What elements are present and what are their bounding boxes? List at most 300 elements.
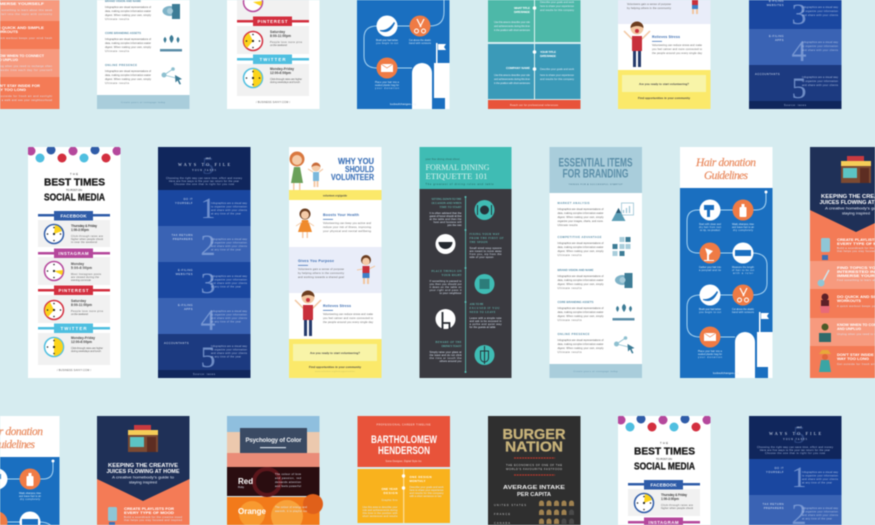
- card: keeping creative juices, top row: [0, 0, 60, 109]
- icon: storefront: [841, 156, 871, 183]
- section: online presence: ONLINE PRESENCE: [558, 332, 590, 336]
- section: boosts your health: your physical and mental wellbeing: [323, 229, 372, 233]
- section: gives you purpose: by helping others in the community: [298, 271, 345, 275]
- card: why you should volunteer, top row: Are you ready to start volunteering?: [639, 82, 689, 86]
- section: competitive advantage: [558, 235, 630, 257]
- section 3: WEBSITES: [176, 272, 193, 276]
- step 4: [436, 303, 502, 329]
- step captions: Place your hair into a: [698, 350, 723, 353]
- step 5: the toast and do not clink: [430, 353, 462, 357]
- section: market analysis: data, making complex information easier: [558, 211, 604, 215]
- panel: orange: Orange: [238, 507, 267, 516]
- tip rows: INTERESTED IN AND: [837, 270, 875, 274]
- step 3: [430, 270, 494, 295]
- panel: twitter: Click-through rates are higher: [71, 346, 103, 350]
- card: ways to file taxes, top row: and share with your clients: [802, 48, 839, 52]
- step 5: the rims or touch the: [430, 356, 462, 360]
- card: keeping creative juices, bottom row: JUICES FLOWING AT HOME: [106, 469, 180, 475]
- card: best times social media, bottom row: SOCIAL MEDIA: [634, 461, 695, 473]
- card: teal and blue timeline, top row: DATE RANGE: [514, 10, 530, 14]
- section: market analysis: Ultimate results: [558, 223, 578, 227]
- title: HENDERSON: [378, 445, 430, 457]
- card: ways to file taxes, bottom row: [749, 416, 842, 525]
- panel: pinterest: Saturday: [71, 299, 86, 303]
- section: boosts your health: Volunteering can keep you active and: [323, 221, 372, 225]
- timeline: Graphic firm: [382, 498, 398, 502]
- card: best times social media, bottom row: 1:00-3:00pm: [661, 497, 679, 501]
- section: market analysis: Infographics are visual representations of: [558, 207, 604, 211]
- section 4: at any time of the year: [211, 320, 241, 324]
- card: ways to file taxes, bottom row: DO IT: [775, 466, 784, 470]
- card: hair donation guidelines, top row: locksofchanges.org: [390, 102, 416, 106]
- card: bartholomew henderson timeline: [358, 416, 450, 523]
- card: essential items for branding, top row: Infographics are visual representations of: [105, 37, 151, 41]
- section 1: at any time of the year: [211, 212, 241, 216]
- title: FORMAL DINING: [426, 162, 490, 172]
- card: ways to file taxes, top row: Infographics are a visual way: [802, 5, 839, 9]
- card: essential items for branding, top row: data, making complex information easier: [105, 73, 151, 77]
- step captions: sealed plastic bag for: [698, 353, 722, 356]
- footer: locksofchanges.org: [713, 371, 739, 375]
- panel: red: The colour of love: [275, 472, 302, 476]
- subtitle: [506, 463, 562, 471]
- subtitle: THE ECONOMICS OF ONE OF THE: [506, 463, 562, 467]
- card: essential items for branding, top row: digest. When making your own, simply: [105, 77, 152, 81]
- card: hair donation, bottom row: dry completely: [20, 498, 41, 501]
- step 4: EXCUSED IF YOU: [470, 307, 500, 310]
- card: hair donation guidelines, top row: Cut above the elastic: [409, 39, 432, 42]
- card: teal and blue timeline, top row: Use this area to describe your role: [494, 73, 531, 77]
- step 1: It is often advised that the: [430, 211, 462, 215]
- card: best times social media, top row: Click-through rates are higher: [270, 77, 302, 81]
- card: hair donation guidelines: [680, 147, 772, 378]
- title: staying inspired: [842, 212, 870, 216]
- panel: twitter: 12:00-6:00pm: [71, 340, 92, 344]
- card: best times social media, top row: PINTEREST: [258, 19, 288, 24]
- section 2: [172, 229, 248, 262]
- section 3: E-FILING: [178, 268, 193, 272]
- section: boosts your health: reduce your risk of illness, improving: [323, 225, 372, 229]
- card: essential items for branding, top row: digest. When making your own, simply: [105, 45, 152, 49]
- timeline: [362, 469, 444, 523]
- title: [44, 172, 105, 204]
- panel: orange: warmth, it is playful too: [275, 509, 308, 513]
- card: ways to file taxes, top row: and share with your clients: [802, 13, 839, 17]
- step 1: host and hostess will: [434, 220, 462, 224]
- timeline: with a short sentence or two: [410, 494, 442, 498]
- section: gives you purpose: and working towards a shared goal: [298, 275, 344, 279]
- section: relieves stress: Volunteering can reduce stress and make: [323, 312, 374, 316]
- section 5: 5: [200, 341, 216, 374]
- pictogram chart: [494, 500, 574, 525]
- section 3: and share with your clients: [211, 281, 248, 285]
- card: teal and blue timeline, top row: [488, 0, 580, 109]
- panel: red: demands attention: [275, 480, 302, 484]
- pictogram chart: FRANCE: [494, 512, 510, 516]
- card: ways to file taxes, top row: 4: [792, 35, 806, 68]
- card: ways to file taxes, top row: ACCOUNTANTS: [755, 72, 780, 76]
- section 2: TAX RETURN: [172, 233, 193, 237]
- title: ESSENTIAL ITEMS: [558, 158, 633, 170]
- step 3: PLACE THINGS ON: [432, 270, 462, 273]
- card: ways to file taxes, top row: 5: [792, 72, 806, 105]
- card: ways to file taxes, top row: [749, 0, 842, 109]
- card: ways to file taxes, bottom row: and share with your clients: [802, 513, 839, 517]
- card: best times social media, top row: Monday-Friday: [270, 67, 294, 71]
- panel: facebook: Thursday & Friday: [71, 224, 97, 228]
- title: WHY YOU: [338, 157, 374, 166]
- title: THE: [70, 172, 78, 176]
- title: NATION: [505, 438, 563, 456]
- step 3: it down on the table on: [430, 285, 462, 289]
- card: essential items for branding: [550, 147, 642, 378]
- section: online presence: data, making complex information easier: [558, 342, 604, 346]
- step 3: If something is passed to: [430, 279, 462, 283]
- card: teal and blue timeline, top row: Reach out for professional references: [510, 104, 559, 107]
- timeline: and results for this company: [410, 491, 444, 495]
- card: teal and blue timeline, top row: COMPANY NAME: [506, 66, 530, 70]
- panel: twitter: Monday-Friday: [71, 336, 95, 340]
- card: ways to file taxes, top row: Source: taxes: [784, 103, 807, 107]
- title: 5: [202, 154, 214, 180]
- title: BEST TIMES: [44, 177, 105, 189]
- card: essential items for branding, top row: Ultimate results: [105, 17, 130, 21]
- card: keeping the creative juices flowing: [810, 147, 875, 378]
- step 5: others around you: [440, 359, 462, 363]
- section: brand vision and name: data, making complex information easier: [558, 278, 604, 282]
- card: essential items for branding, top row: Infographics are visual representations of: [105, 5, 151, 9]
- section: core branding assets: Infographics are visual representations of: [558, 306, 604, 310]
- call to action: Find opportunities in your community: [309, 365, 361, 369]
- timeline: role and achievements during: [362, 508, 398, 512]
- timeline: Describe your goals and work: [410, 485, 444, 489]
- section 3: at any time of the year: [211, 284, 241, 288]
- step captions: [698, 223, 755, 359]
- section 1: Infographics are a visual way: [211, 201, 248, 205]
- title box: Psychology of Color: [246, 438, 302, 444]
- card: ways to file taxes, bottom row: Choose the one that is right for you now: [765, 451, 825, 455]
- panel: instagram: evening commute: [71, 278, 92, 282]
- card: keeping creative juices, bottom row: EVERY TYPE OF MOOD: [124, 511, 174, 515]
- section 1: [175, 192, 248, 225]
- card: teal and blue timeline, top row: Describe your goals and work: [540, 67, 575, 71]
- card: hair donation guidelines, top row: Place your hair into a: [375, 81, 400, 84]
- panel: instagram: 5:00-6:00pm: [71, 266, 92, 270]
- step 4: ASK TO BE: [470, 303, 484, 306]
- title: THINGS FOR A SUCCESSFUL STARTUP: [568, 183, 623, 186]
- card: hair donation, bottom row: and leave hair to air: [19, 495, 41, 498]
- title: [371, 424, 437, 463]
- panel: pinterest: on the weekend: [71, 312, 89, 316]
- step captions: band with scissors: [732, 311, 755, 314]
- card: ways to file taxes, top row: Infographics are a visual way: [802, 75, 839, 79]
- title: [558, 158, 633, 186]
- step 1: guest of honor should sit first: [430, 214, 462, 218]
- card: why you should volunteer, top row: Volunteering can reduce stress and make: [652, 43, 703, 47]
- title: PROFESSIONAL CAREER TIMELINE: [376, 424, 431, 426]
- section 4: to organize your information: [211, 312, 248, 316]
- pictogram chart: CANADA: [494, 521, 510, 525]
- section 1: and share with your clients: [211, 208, 248, 212]
- card: teal and blue timeline, top row: here to share your experience: [540, 73, 575, 77]
- panel: pinterest: 8:00-11:00pm: [71, 303, 92, 307]
- step 3: to your neighbour: [440, 291, 462, 295]
- card: ways to file taxes, top row: APPS: [775, 38, 784, 42]
- icons: social circles: [26, 146, 122, 162]
- card: psychology of color: [227, 416, 323, 525]
- title: [820, 194, 875, 216]
- timeline: this time in the position with: [362, 511, 398, 515]
- step captions: and leave hair to air: [732, 226, 754, 229]
- section 4: E-FILING: [178, 303, 193, 307]
- steps: [700, 190, 768, 348]
- card: ways to file taxes, bottom row: YOURSELF: [766, 470, 784, 474]
- step captions: Gather your hair into: [699, 266, 722, 269]
- card: ways to file taxes, bottom row: TAX RETURN: [763, 502, 784, 506]
- section: competitive advantage: Ultimate results: [558, 253, 582, 257]
- step 4: Leave with a simple note: [470, 316, 502, 320]
- card: ways to file taxes, top row: Infographics are a visual way: [802, 40, 839, 44]
- card: teal and blue timeline, top row: and results for this company: [540, 8, 575, 12]
- step captions: dry hair from root: [699, 226, 721, 229]
- icons: tip rows: [818, 238, 831, 372]
- card: why you should volunteer: [289, 147, 382, 378]
- section: relieves stress: the people around you every single day: [323, 320, 374, 324]
- section: core branding assets: CORE BRANDING ASSETS: [558, 300, 594, 304]
- step captions: dry completely: [733, 229, 754, 232]
- step 2: FIXING YOUR WAY: [470, 233, 500, 236]
- title: Guidelines: [704, 170, 749, 182]
- card: keeping creative juices, bottom row: Build a soundtrack for the creative mood: [124, 515, 183, 519]
- section 5: at any time of the year: [211, 354, 241, 358]
- title: [166, 154, 243, 186]
- section 5: and share with your clients: [211, 351, 248, 355]
- card: essential items for branding, top row: CORE BRANDING ASSETS: [105, 31, 141, 35]
- card: teal and blue timeline, top row: Use this area to describe your role: [494, 20, 531, 24]
- card: why you should volunteer, top row: you feel calmer and more connected to: [652, 47, 703, 51]
- step 4: for the guests at table: [470, 325, 496, 329]
- section: brand vision and name: [558, 268, 632, 290]
- panel: twitter: [38, 324, 110, 365]
- section 2: Infographics are a visual way: [211, 237, 248, 241]
- card: ways to file taxes, top row: E-FILING: [769, 0, 784, 3]
- card: teal and blue timeline, top row: and results for this company: [540, 77, 575, 81]
- card: teal and blue timeline, top row: in the position with short sentences: [494, 81, 531, 85]
- subtitle: WORLD'S FAVOURITE FASTFOOD: [506, 467, 562, 471]
- section: market analysis: organize your images, charts, and more.: [558, 219, 604, 223]
- card: ways to file taxes, top row: to organize your information: [802, 79, 839, 83]
- title: TO POST ON: [66, 188, 82, 192]
- card: ways to file taxes, top row: to organize your information: [802, 9, 839, 13]
- panel: red: Red: [238, 477, 253, 486]
- card: ways to file taxes, bottom row: Here are five ways to file your tax return for the year: [760, 448, 830, 452]
- panel: facebook: 1:00-3:00pm: [71, 228, 89, 232]
- chart heading: PER CAPITA: [517, 492, 551, 498]
- step captions: with a ruler: [733, 272, 753, 275]
- step 1: [430, 198, 494, 227]
- call to action: www.volunteer.org/find-opportunities: [315, 370, 356, 373]
- card: best times social media, bottom row: THE: [660, 441, 668, 445]
- step 5: [430, 341, 494, 365]
- card: teal and blue timeline, top row: Describe your goals and work: [540, 0, 575, 4]
- card: best times social media, bottom row: INSTAGRAM: [648, 520, 679, 525]
- title: Choosing the right way can save time, effort and money: [166, 176, 243, 180]
- step 5: BEWARE OF THE: [436, 341, 462, 344]
- section 1: YOURSELF: [175, 201, 193, 205]
- panel: instagram: [38, 248, 110, 285]
- section: gives you purpose: Gives You Purpose: [298, 259, 334, 263]
- timeline: Use this area to describe your: [362, 505, 398, 509]
- card: essential items for branding, top row: Create yours at venngage today: [121, 101, 166, 104]
- card: best times to post on social media: [26, 146, 122, 378]
- card: keeping creative juices, bottom row: [97, 416, 190, 525]
- card: ways to file taxes, bottom row: PREPARERS: [764, 506, 784, 510]
- card: ways to file taxes, bottom row: WAYS TO FILE: [769, 431, 821, 436]
- card: teal and blue timeline, top row: DATE RANGE: [540, 54, 556, 58]
- card: essential items for branding, top row: Ultimate results: [105, 49, 130, 53]
- section: competitive advantage: COMPETITIVE ADVANTAGE: [558, 235, 602, 239]
- section: online presence: digest. When making your own, simply: [558, 346, 604, 350]
- card: why you should volunteer, top row: Find opportunities in your community: [638, 96, 690, 100]
- section 5: to organize your information: [211, 348, 248, 352]
- section: online presence: Ultimate results: [558, 350, 582, 354]
- card: why you should volunteer, top row: Relieves Stress: [652, 35, 680, 39]
- title: and: [205, 156, 211, 160]
- panel: red: and passion, red: [275, 476, 302, 480]
- card: why you should volunteer, top row: [618, 0, 710, 109]
- card: essential items for branding, top row: ONLINE PRESENCE: [105, 63, 137, 67]
- panel: instagram: Most Instagram posts: [71, 272, 102, 276]
- card: hair donation guidelines, top row: sealed plastic bag for: [375, 84, 399, 87]
- panel: facebook: FACEBOOK: [60, 214, 87, 218]
- section 5: Infographics are a visual way: [211, 344, 248, 348]
- card: ways to file taxes, bottom row: YOUR TAXES: [783, 438, 808, 441]
- panel: red: Ruby: [238, 485, 245, 489]
- card: teal and blue timeline, top row: YOUR TITLE: [540, 50, 556, 54]
- panel: facebook: [38, 211, 110, 247]
- step 4: and ask to be excused in: [470, 319, 502, 323]
- card: essential items for branding, top row: data, making complex information easier: [105, 9, 151, 13]
- mailbox illustration: [735, 312, 772, 378]
- card: best times social media, bottom row: higher when people check: [661, 506, 694, 510]
- step captions: Brush your hair before: [699, 308, 722, 311]
- card: keeping creative juices, bottom row: KEEPING THE CREATIVE: [108, 463, 179, 469]
- title: YOUR TAXES: [192, 169, 217, 172]
- card: best times social media, top row: 8:00-11:00pm: [270, 34, 291, 38]
- step 2: THE SPOON: [470, 241, 488, 244]
- section: relieves stress: [295, 290, 374, 336]
- path: [687, 192, 767, 337]
- step captions: you begin to cut: [699, 311, 721, 314]
- card: why you should volunteer, top row: the people around you every single day: [652, 51, 703, 55]
- title: Some Designer, Digital Style Inc: [386, 460, 422, 463]
- section 1: to organize your information: [211, 204, 248, 208]
- section 2: PREPARERS: [173, 237, 193, 241]
- section: online presence: [558, 332, 634, 354]
- section: online presence: Infographics are visual representations of: [558, 338, 604, 342]
- step 2: [436, 233, 504, 259]
- section 3: [176, 267, 248, 300]
- card: hair donation, bottom row: [0, 416, 60, 525]
- illustration: girl and boy: [290, 152, 323, 190]
- timeline: short sentences and results: [362, 514, 398, 518]
- section: boosts your health: Boosts Your Health: [323, 213, 359, 217]
- card: ways to file taxes, bottom row: 5: [793, 423, 805, 449]
- panel: pinterest: PINTEREST: [58, 288, 89, 293]
- card: burger nation: [488, 416, 580, 525]
- call to action: [309, 351, 361, 373]
- call to action: Are you ready to start volunteering?: [310, 351, 360, 355]
- section: market analysis: digest. When making your own, simply: [558, 215, 604, 219]
- card: ways to file taxes, bottom row: to organize your information: [802, 510, 839, 514]
- section 4: [178, 303, 248, 337]
- panel: twitter: during weekdays and lunch: [71, 349, 102, 353]
- card: essential items for branding, top row: digest. When making your own, simply: [105, 13, 152, 17]
- step 2: side of your spoon: [470, 255, 494, 259]
- footer: Create yours at venngage today: [574, 370, 618, 373]
- panel: red: [227, 467, 320, 496]
- section: competitive advantage: digest. When making your own, simply: [558, 249, 604, 253]
- step 1: TIME TO START: [440, 206, 462, 209]
- card: best times social media, top row: [227, 0, 320, 109]
- card: hair donation guidelines, top row: your donation: [375, 87, 400, 90]
- title: VOLUNTEER: [331, 173, 374, 182]
- title: SOCIAL MEDIA: [44, 192, 105, 204]
- card: best times social media, bottom row: [616, 414, 712, 525]
- title: WAYS TO FILE: [178, 162, 230, 167]
- timeline: [464, 196, 466, 373]
- section: boosts your health: [296, 208, 372, 238]
- step captions: a ponytail and tie: [699, 269, 722, 272]
- card: ways to file taxes, top row: WEBSITES: [767, 3, 784, 7]
- panel: pinterest: People love more pins: [71, 309, 104, 313]
- step 1: OCCASION AND WHEN: [432, 202, 462, 205]
- step 2: are meant to move away: [470, 249, 502, 253]
- tip rows: WORKOUTS: [837, 299, 861, 303]
- card: ways to file your taxes: [158, 147, 250, 378]
- card: ways to file taxes, bottom row: to organize your information: [802, 474, 839, 478]
- section 1: 1: [200, 192, 216, 225]
- section 2: to organize your information: [211, 240, 248, 244]
- title: SHOULD: [345, 165, 374, 174]
- section: competitive advantage: Infographics are visual representations of: [558, 241, 604, 245]
- step 5: DRINK'S TOAST: [442, 345, 462, 348]
- step captions: your donation: [698, 356, 723, 359]
- card: ways to file taxes, bottom row: Infographics are a visual way: [802, 470, 839, 474]
- section 3: to organize your information: [211, 278, 248, 282]
- section: market analysis: MARKET ANALYSIS: [558, 201, 590, 205]
- section: gives you purpose: [298, 255, 375, 284]
- section 4: 4: [200, 304, 216, 337]
- panel: facebook: Click-through rates are: [71, 234, 104, 238]
- card: ways to file taxes, top row: to organize your information: [802, 44, 839, 48]
- card: best times social media, top row: TWITTER: [260, 57, 286, 62]
- card: keeping creative juices, bottom row: staying inspired: [129, 480, 157, 484]
- panel: orange: The colour of energy and: [275, 505, 308, 509]
- panel: red: and feels powerful: [275, 484, 301, 488]
- title: [695, 157, 756, 182]
- footer: Source: taxes: [193, 372, 216, 376]
- card: ways to file taxes, bottom row: at any time of the year: [802, 480, 832, 484]
- card: teal and blue timeline, top row: and achievements during this time: [494, 24, 531, 28]
- section: core branding assets: digest. When making your own, simply: [558, 314, 604, 318]
- step 1: at the table and then the: [430, 217, 462, 221]
- step 3: YOUR RIGHT: [442, 274, 462, 277]
- card: keeping creative juices, bottom row: A creative homebody's guide to: [112, 476, 174, 480]
- section 2: and share with your clients: [211, 244, 248, 248]
- card: best times social media, top row: / BUSINESS SAVVY.COM /: [256, 101, 290, 104]
- timeline: MONTHLY: [410, 479, 426, 483]
